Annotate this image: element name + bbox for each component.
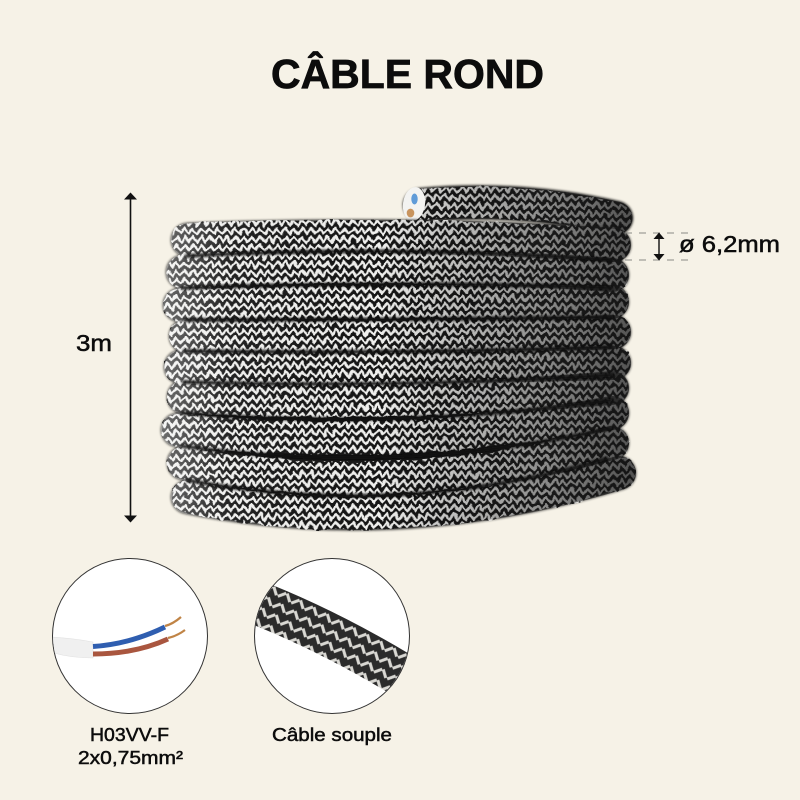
diameter label: ø 6,2mm <box>679 231 780 257</box>
arrow: total length 3m <box>124 192 137 522</box>
circle: H03VV-F wire <box>50 558 208 714</box>
wire label <box>78 724 183 768</box>
circle: braided flexible cable <box>245 558 410 714</box>
wire label: H03VV-F <box>90 724 169 745</box>
icon: copper strands <box>165 617 185 638</box>
title: CÂBLE ROND <box>271 51 544 97</box>
icon: blue conductor <box>93 627 165 646</box>
flexible cable label: Câble souple <box>272 724 392 745</box>
front coil turns <box>178 236 619 513</box>
icon: white sheath <box>50 637 93 658</box>
cable coil <box>178 186 619 513</box>
back coil with cut end <box>401 186 616 222</box>
dimension: cable diameter <box>625 232 690 260</box>
length label: 3m <box>76 330 112 356</box>
icon: brown conductor <box>93 639 168 654</box>
wire label: 2x0,75mm² <box>78 747 183 768</box>
